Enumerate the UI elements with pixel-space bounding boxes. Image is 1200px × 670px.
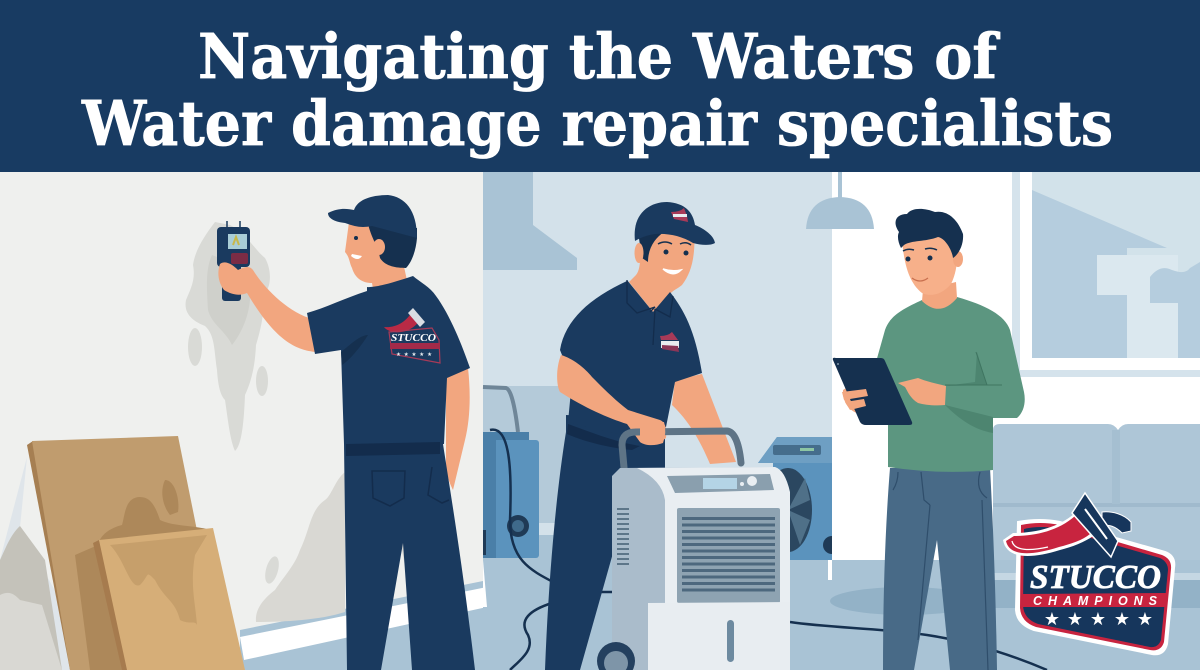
left arm and hand <box>557 355 666 444</box>
control panel <box>667 474 774 493</box>
ear <box>373 239 385 255</box>
pendant lamp <box>806 172 874 229</box>
title <box>81 20 1113 160</box>
tablet hand <box>843 387 868 414</box>
sweater shading <box>945 352 1002 433</box>
neck and face <box>345 222 408 295</box>
moisture meter <box>217 221 250 301</box>
face details <box>658 242 691 274</box>
small stain left <box>188 328 202 366</box>
small board <box>93 528 245 670</box>
large board <box>27 436 225 670</box>
rating stars: ★ <box>1067 609 1083 630</box>
cap logo <box>671 208 688 222</box>
eye <box>354 236 358 240</box>
left wall <box>0 172 483 670</box>
badge shield <box>1016 520 1174 654</box>
drywall boards <box>27 436 245 670</box>
chest logo <box>660 332 679 352</box>
water tank <box>648 602 790 670</box>
window <box>1012 172 1200 377</box>
middle room wall <box>483 172 832 670</box>
back wall unit <box>483 386 593 536</box>
meter screen <box>228 234 247 249</box>
back logo: ★★★★★ <box>396 352 432 358</box>
power cords <box>490 430 1047 670</box>
dehumidifier handle <box>622 431 741 490</box>
back pockets <box>372 467 449 506</box>
side vent <box>617 508 629 565</box>
title: Water damage repair specialists <box>81 87 1113 160</box>
belt <box>346 442 440 456</box>
left floor and baseboard <box>240 581 487 670</box>
face <box>902 232 958 295</box>
collar <box>627 280 673 345</box>
rating stars <box>1044 609 1153 630</box>
brand name: STUCCO <box>1030 559 1161 596</box>
right arm <box>672 374 736 464</box>
neck <box>922 282 957 309</box>
hair <box>896 209 963 258</box>
unit side <box>612 467 790 670</box>
face details <box>903 248 937 281</box>
champions tagline: CHAMPIONS <box>1033 594 1158 608</box>
far right sliver of stain <box>400 540 420 603</box>
stucco champions logo <box>1003 493 1174 654</box>
trousers <box>883 468 997 670</box>
trousers <box>545 415 665 670</box>
hair <box>638 232 664 262</box>
tank handle <box>727 620 734 662</box>
ear <box>634 243 644 263</box>
pointing hand <box>898 378 946 405</box>
hair <box>368 224 417 268</box>
small stain low <box>263 555 281 585</box>
rating stars: ★ <box>1090 609 1106 630</box>
dial <box>740 476 757 486</box>
meter buttons <box>231 253 248 264</box>
mouth <box>351 254 362 259</box>
polo shirt <box>307 276 470 444</box>
raised arm and hand <box>218 262 316 352</box>
right blue air mover <box>758 437 832 560</box>
unit top and front <box>637 467 790 606</box>
middle floor <box>483 523 832 670</box>
rating stars: ★ <box>1044 609 1060 630</box>
belt <box>567 424 640 450</box>
sofa <box>993 424 1200 575</box>
red ribbon band <box>1022 593 1168 607</box>
header banner <box>0 0 1200 172</box>
lower stain <box>256 472 345 622</box>
trowel <box>1072 493 1131 557</box>
background equipment <box>483 387 1047 670</box>
air grille <box>677 508 780 603</box>
inner stain <box>207 255 250 345</box>
left blue air mover <box>483 387 539 558</box>
wheel <box>597 642 635 670</box>
cap <box>328 195 417 238</box>
rating stars: ★ <box>1137 609 1153 630</box>
display <box>703 478 737 489</box>
dehumidifier <box>597 467 790 670</box>
right floor <box>828 560 1200 670</box>
cap <box>635 202 715 245</box>
back logo <box>384 308 440 363</box>
trouser lines <box>893 472 988 670</box>
tablet <box>833 358 912 425</box>
sweater <box>876 297 1025 472</box>
tablet fingers <box>842 389 868 410</box>
red swoosh <box>1003 513 1093 556</box>
worker 2 with dehumidifier <box>545 202 790 670</box>
upper stain <box>186 222 270 451</box>
range hood <box>483 172 577 270</box>
back logo: STUCCO <box>391 332 436 344</box>
sleeve shadow <box>341 335 368 365</box>
worker 1 right arm <box>446 368 470 490</box>
gripping fingers <box>640 422 665 445</box>
neck and face <box>629 225 694 312</box>
small stain right <box>256 366 268 396</box>
trousers <box>344 444 475 670</box>
wall water stains <box>0 222 420 670</box>
right room white wall <box>832 172 1200 560</box>
title: Navigating the Waters of <box>198 20 1000 93</box>
ear <box>953 251 963 267</box>
customer with tablet <box>833 209 1025 670</box>
scene background <box>0 172 1200 670</box>
rating stars: ★ <box>1114 609 1130 630</box>
polo shirt <box>560 280 702 440</box>
corner stain <box>0 457 70 670</box>
worker 1 at wall <box>217 195 475 670</box>
